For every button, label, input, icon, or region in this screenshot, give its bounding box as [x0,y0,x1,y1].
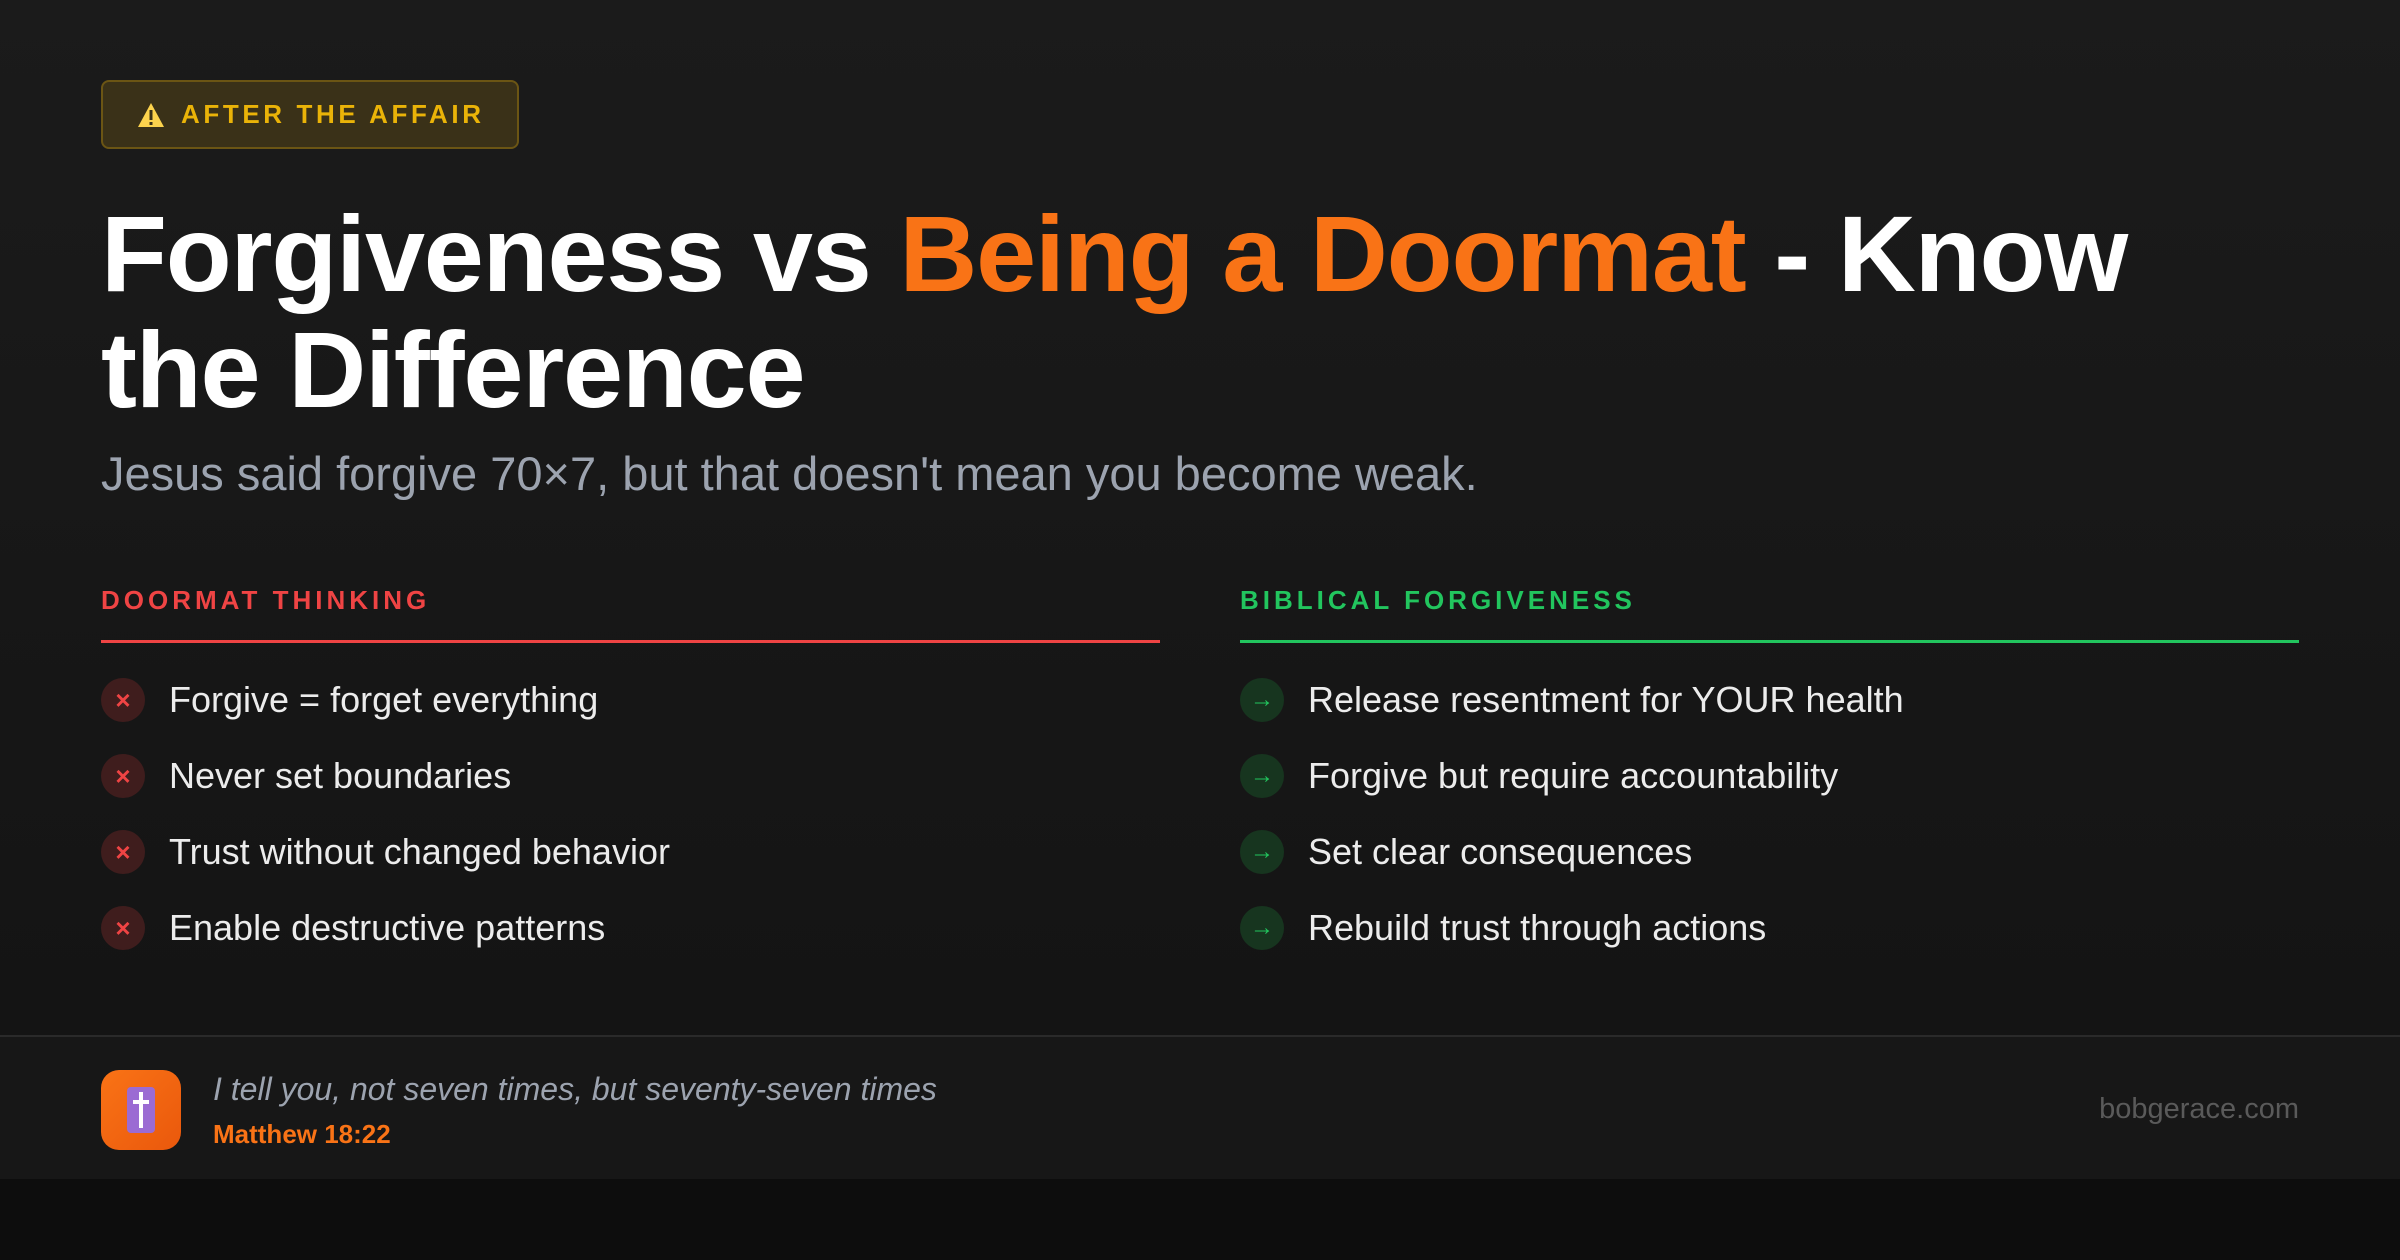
item: accountability: Forgive but require accountability [1308,755,1838,796]
item: rebuild trust: → [1250,914,1274,941]
item: enable patterns: Enable destructive patterns [169,907,605,948]
item: consequences: Set clear consequences [1308,831,1692,872]
icon: cross [101,1070,181,1150]
badge: after the affair: AFTER THE AFFAIR [181,99,485,129]
item: release resentment: → [1250,686,1274,713]
item: forgive = forget: × [115,684,131,714]
item: forgive = forget: Forgive = forget everything [169,679,598,720]
item: trust without change: × [115,836,131,866]
item: rebuild trust: Rebuild trust through actions [1308,907,1766,948]
panel: doormat thinking [101,585,1160,950]
item: accountability: → [1250,762,1274,789]
footer [0,1035,2400,1179]
panel: doormat thinking: DOORMAT THINKING [101,585,430,615]
title: Forgiveness vs Being a Doormat - Know [101,193,2127,314]
item: never set boundaries: Never set boundaries [169,755,511,796]
panel: biblical forgiveness [1240,585,2299,950]
item: enable patterns: × [115,912,131,942]
title: the Difference [101,309,804,430]
item: never set boundaries: × [115,760,131,790]
item: trust without change: Trust without changed behavior [169,831,670,872]
badge: after the affair [101,80,519,149]
subtitle: Jesus said forgive 70×7, but that doesn't mean you become weak. [101,447,1478,500]
quote text: I tell you, not seven times, but seventy-seven times [213,1071,937,1107]
item: consequences: → [1250,838,1274,865]
title [101,193,2128,430]
site url: bobgerace.com [2099,1093,2299,1125]
scripture reference: Matthew 18:22 [213,1119,391,1149]
panel: biblical forgiveness: BIBLICAL FORGIVENESS [1240,585,1636,615]
item: release resentment: Release resentment for YOUR health [1308,679,1904,720]
